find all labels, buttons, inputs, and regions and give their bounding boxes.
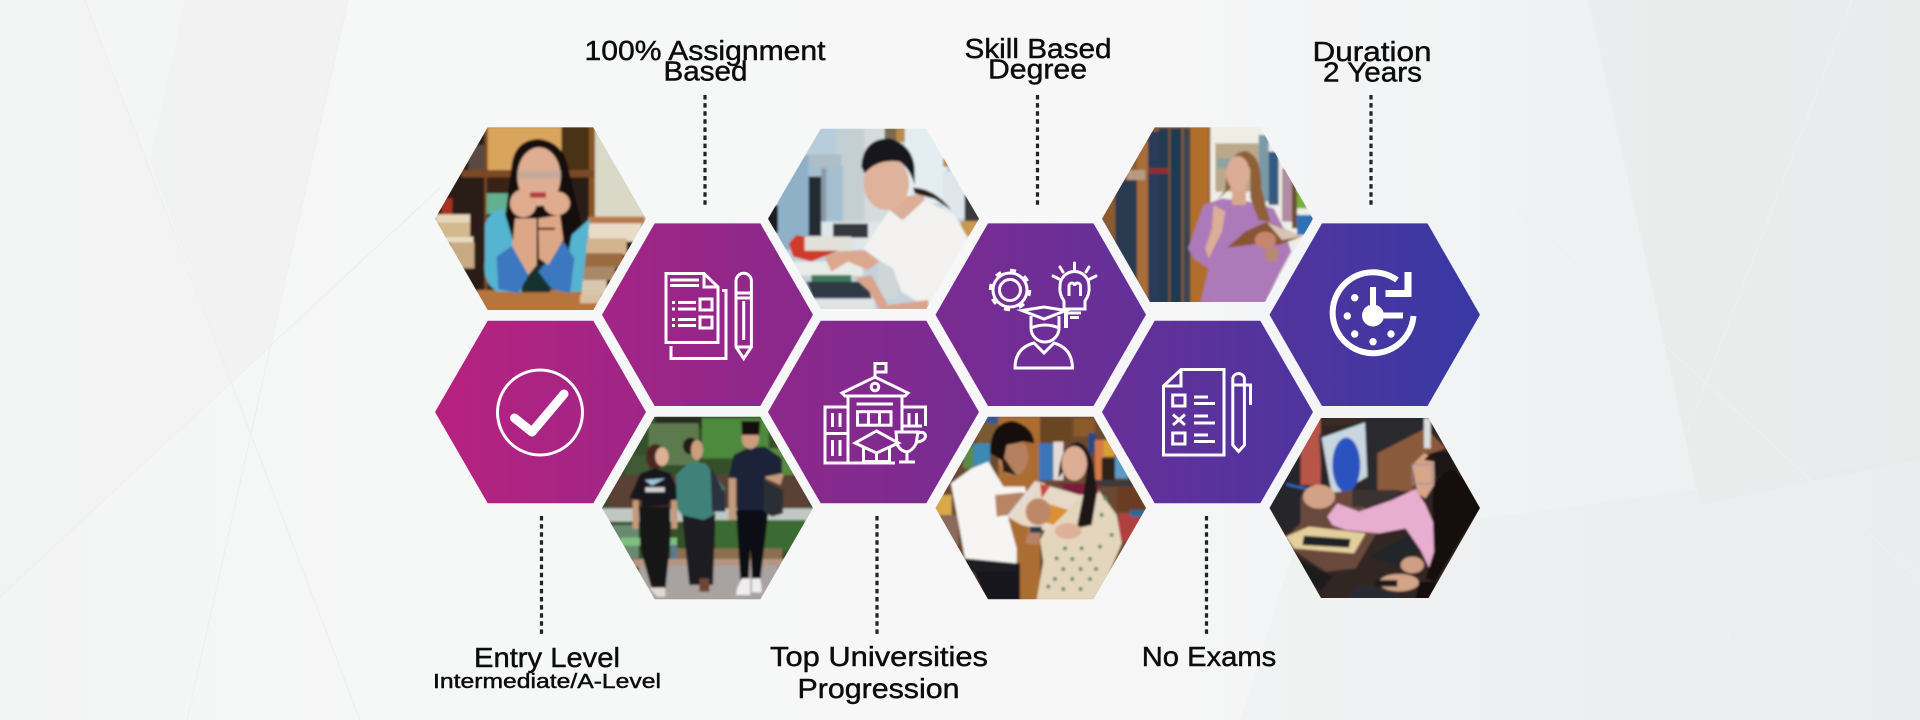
icon: check mark in circle bbox=[498, 370, 582, 455]
label: Entry Level Intermediate/A-Level bbox=[433, 642, 661, 693]
label: Top Universities Progression: Progression bbox=[798, 673, 960, 704]
label: Skill Based Degree: Skill Based bbox=[964, 33, 1112, 64]
photo: two students reading a book bbox=[932, 412, 1152, 605]
dotted connector: No Exams bbox=[1205, 516, 1208, 634]
label: 100% Assignment Based: 100% Assignment bbox=[584, 35, 826, 66]
photo: students at computer bbox=[1270, 418, 1480, 598]
icon: document and pencil bbox=[666, 273, 751, 358]
label: 100% Assignment Based: Based bbox=[664, 56, 748, 86]
hexagon: Skill Based Degree bbox=[936, 223, 1146, 406]
label: Duration 2 Years: 2 Years bbox=[1323, 56, 1422, 88]
label: Duration 2 Years bbox=[1312, 36, 1432, 88]
dotted connector: Top Universities Progression bbox=[875, 516, 879, 634]
label: Skill Based Degree: Degree bbox=[988, 54, 1087, 84]
hexagon: Entry Level bbox=[435, 321, 646, 503]
label: No Exams: No Exams bbox=[1142, 641, 1276, 672]
photo: student with books bbox=[432, 122, 652, 315]
label: Top Universities Progression bbox=[770, 641, 988, 704]
dotted connector: Entry Level bbox=[540, 516, 543, 634]
dotted connector: 100% Assignment Based bbox=[703, 95, 707, 208]
label: Entry Level Intermediate/A-Level: Intermediate/A-Level bbox=[433, 671, 661, 693]
hexagon: No Exams bbox=[1102, 321, 1313, 503]
dotted connector: Skill Based Degree bbox=[1036, 95, 1039, 208]
photo: three students walking bbox=[599, 412, 819, 605]
label: Entry Level Intermediate/A-Level: Entry Level bbox=[474, 642, 620, 673]
photo: student in library holding book bbox=[1102, 127, 1313, 302]
hexagon: 100% Assignment Based bbox=[602, 223, 813, 406]
label: Duration 2 Years: Duration bbox=[1312, 36, 1432, 67]
dotted connector: Duration 2 Years bbox=[1369, 95, 1373, 208]
icon: university building with cap and trophy bbox=[825, 364, 926, 463]
icon: exam sheet and pen bbox=[1164, 370, 1250, 455]
icon: graduate with gear and light bulb bbox=[990, 263, 1096, 368]
label: Top Universities Progression: Top Universities bbox=[770, 641, 988, 672]
label: 100% Assignment Based bbox=[584, 35, 826, 86]
photo: student at electronics lab bbox=[768, 128, 979, 309]
hexagon: Top Universities Progression bbox=[768, 321, 979, 503]
label: Skill Based Degree bbox=[964, 33, 1112, 84]
icon: clock with circular arrow bbox=[1333, 272, 1414, 353]
hexagon: Duration 2 Years bbox=[1270, 223, 1480, 406]
